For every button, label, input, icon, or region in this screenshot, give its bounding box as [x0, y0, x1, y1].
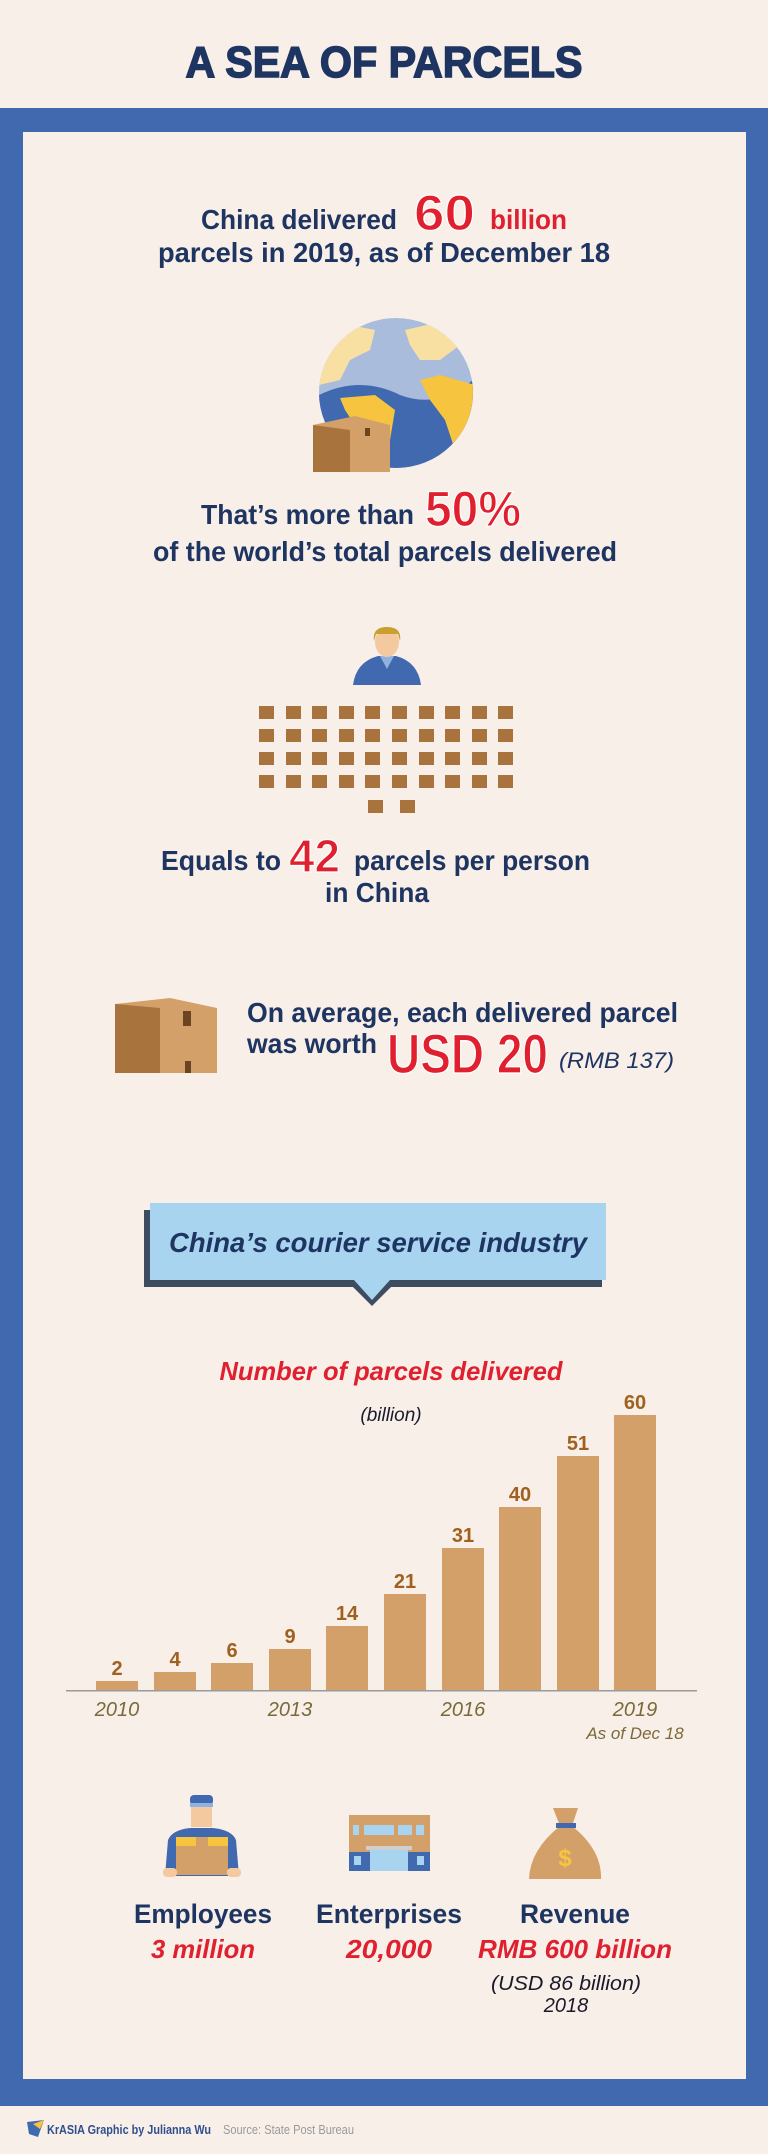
- stats: employees: Employees: [134, 1899, 272, 1929]
- stats: employees: 3 million: [151, 1934, 255, 1964]
- text block: 42 parcels per person: Equals to: [161, 845, 281, 876]
- footer credits: Source: State Post Bureau: [223, 2122, 354, 2137]
- title: A SEA OF PARCELS: [186, 38, 582, 87]
- text block: USD 20: [246, 997, 678, 1085]
- bar chart: 60: [624, 1392, 646, 1414]
- text block: 50%: [153, 481, 617, 567]
- footer credits: [27, 2120, 354, 2137]
- chart title: (billion): [360, 1405, 422, 1426]
- stats: enterprises: [316, 1899, 462, 1964]
- icon: money bag: $: [558, 1845, 572, 1872]
- stats: enterprises: Enterprises: [316, 1899, 462, 1929]
- text block: 42 parcels per person: parcels per person: [354, 845, 590, 876]
- icon: building: [349, 1815, 430, 1871]
- text block: 60 billion: China delivered: [201, 204, 397, 235]
- text block: 50%: of the world’s total parcels delivered: [153, 536, 617, 567]
- bar chart: 4: [169, 1649, 181, 1671]
- bar chart: As of Dec 18: [585, 1724, 684, 1743]
- bar chart: 2: [111, 1658, 123, 1680]
- text block: USD 20: (RMB 137): [559, 1048, 674, 1073]
- bar chart: 31: [452, 1525, 474, 1547]
- stats: employees: [134, 1899, 272, 1964]
- callout: China's courier service industry: China’s courier service industry: [169, 1227, 588, 1258]
- bar chart: 40: [509, 1484, 531, 1506]
- text block: 42 parcels per person: [161, 830, 590, 908]
- footer credits: KrASIA Graphic by Julianna Wu: [47, 2122, 211, 2137]
- icon: money bag: [529, 1808, 601, 1879]
- bar chart: 2013: [267, 1699, 312, 1721]
- bar chart: 21: [394, 1571, 416, 1593]
- icon grid: 42 parcels: [259, 706, 513, 813]
- text block: 60 billion: [158, 185, 610, 268]
- bar chart: 51: [567, 1433, 589, 1455]
- stats: revenue: 2018: [543, 1995, 588, 2017]
- text block: 42 parcels per person: in China: [325, 877, 429, 908]
- bar chart: 9: [284, 1626, 296, 1648]
- stats: enterprises: 20,000: [345, 1934, 433, 1964]
- text block: USD 20: USD 20: [387, 1022, 548, 1085]
- text block: USD 20: was worth: [246, 1028, 377, 1059]
- bar chart: 14: [336, 1603, 359, 1625]
- text block: 50%: That’s more than: [201, 499, 414, 530]
- bar chart: 2016: [440, 1699, 486, 1721]
- text block: 50%: 50%: [425, 481, 521, 537]
- text block: 60 billion: parcels in 2019, as of December 18: [158, 237, 610, 268]
- chart title: [220, 1356, 564, 1426]
- stats: revenue: [478, 1899, 672, 2017]
- bar chart: 6: [226, 1640, 238, 1662]
- stats: revenue: (USD 86 billion): [491, 1973, 641, 1995]
- icon: person: [353, 627, 421, 685]
- bar chart: 2019: [612, 1699, 657, 1721]
- text block: USD 20: On average, each delivered parcel: [247, 997, 678, 1028]
- icon: employee: [163, 1795, 241, 1877]
- text block: 60 billion: billion: [490, 204, 567, 235]
- icon: big parcel: [115, 998, 217, 1073]
- text block: 42 parcels per person: 42: [289, 830, 340, 882]
- chart title: Number of parcels delivered: [220, 1356, 564, 1386]
- text block: 60 billion: 60: [414, 185, 475, 241]
- stats: revenue: Revenue: [520, 1899, 630, 1929]
- bar chart: [66, 1392, 697, 1743]
- bar chart: 2010: [94, 1699, 139, 1721]
- stats: revenue: RMB 600 billion: [478, 1934, 672, 1964]
- icon: globe with parcel: [313, 318, 475, 472]
- callout: China's courier service industry: [144, 1203, 606, 1306]
